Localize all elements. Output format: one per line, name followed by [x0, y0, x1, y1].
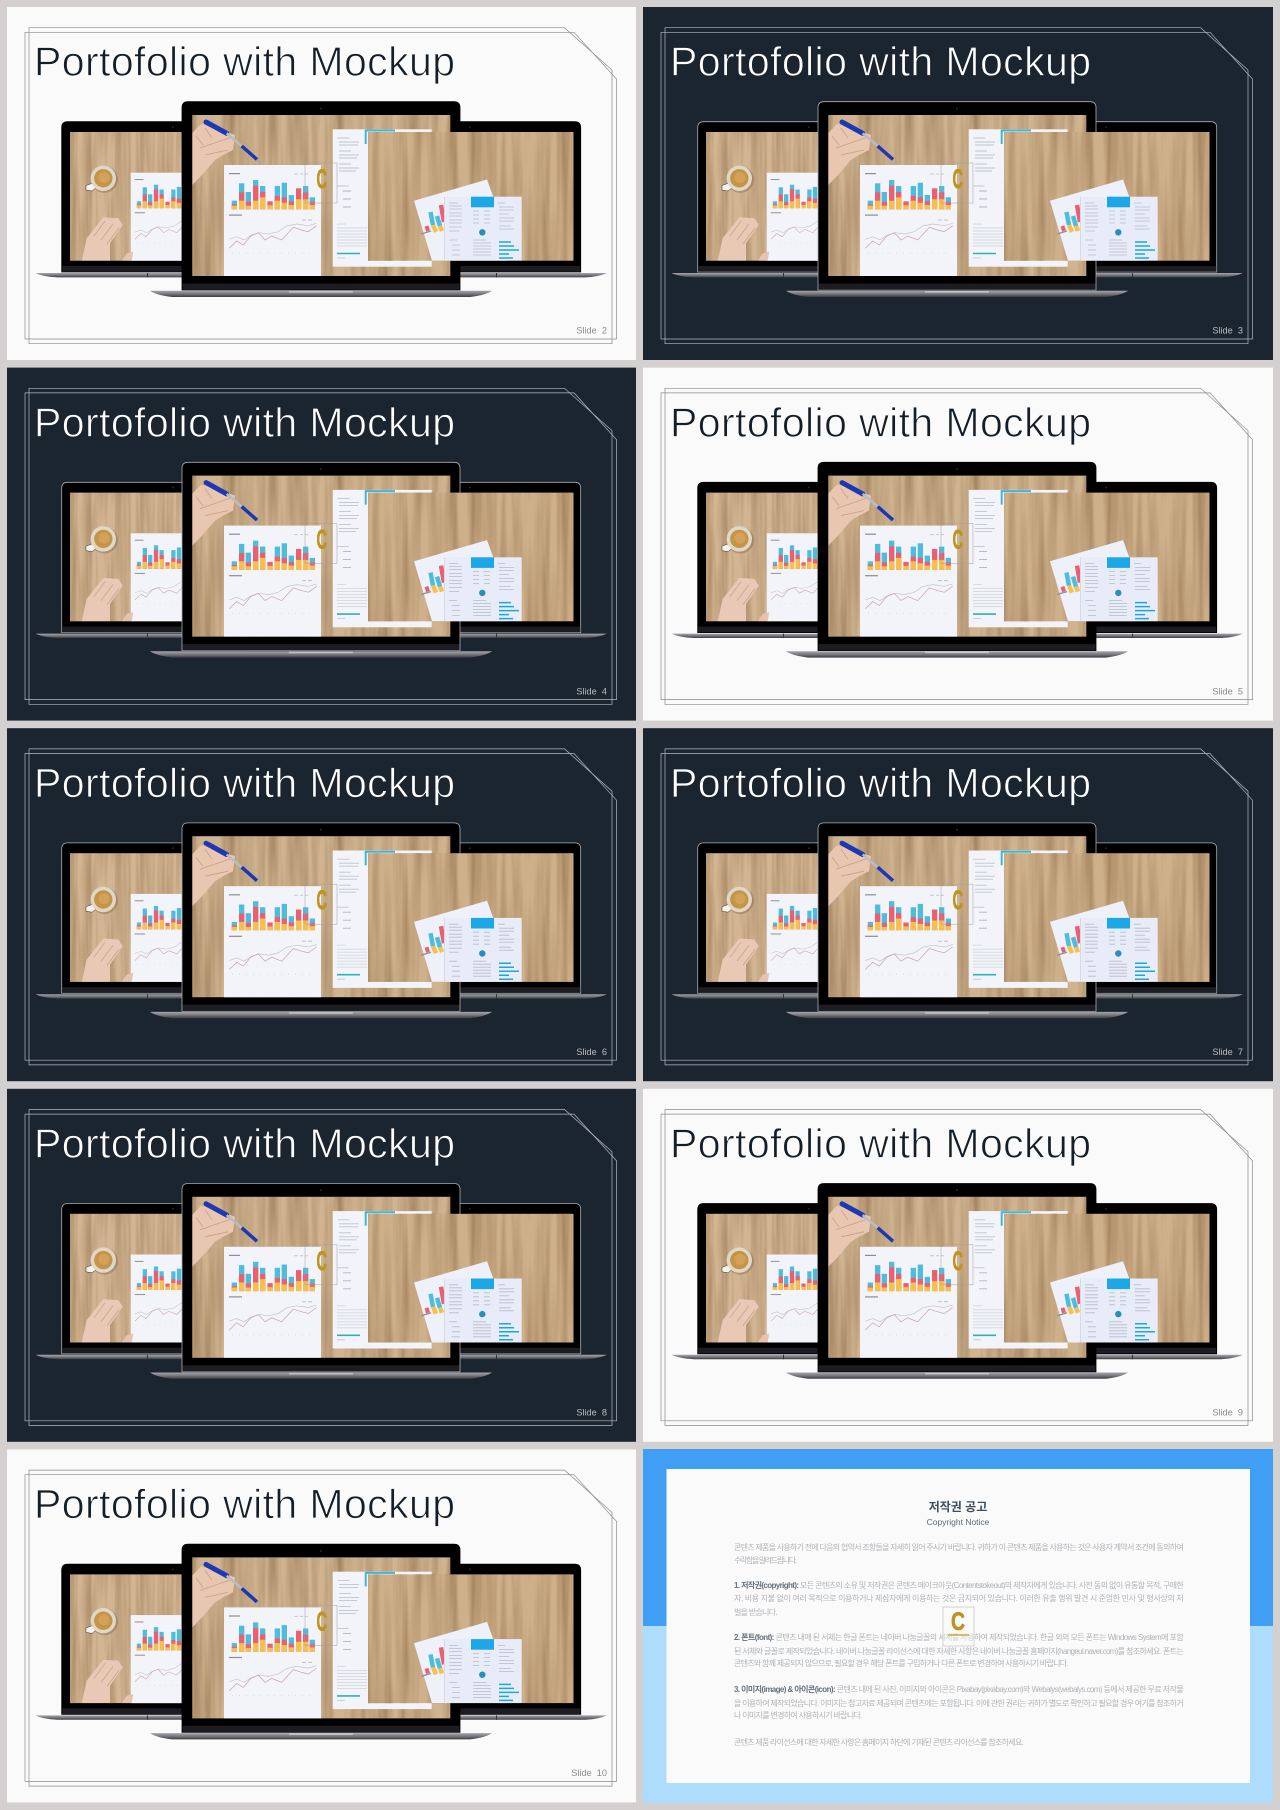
center laptop mockup	[150, 102, 492, 297]
notice body text: 콘텐츠 제품 라이선스에 대한 자세한 사항은 홈페이지 하단에 기재된 콘텐츠 라이선스를 참조하세요.	[734, 1737, 1024, 1747]
heading: Portofolio with Mockup	[34, 1121, 455, 1167]
left laptop mockup	[672, 843, 844, 999]
center laptop mockup	[786, 102, 1128, 297]
notice body text	[734, 1542, 1184, 1747]
light blue lower background	[643, 1626, 1273, 1803]
heading: Portofolio with Mockup	[34, 399, 455, 445]
double frame outline	[25, 1110, 616, 1426]
right laptop screen	[1004, 853, 1210, 982]
watermark logo: C	[316, 164, 327, 194]
right laptop screen	[368, 853, 574, 982]
slide background	[643, 7, 1273, 360]
watermark logo: C	[316, 525, 327, 555]
slide background	[643, 728, 1273, 1081]
double frame outline	[25, 388, 616, 704]
right laptop mockup	[1086, 843, 1243, 999]
heading: Portofolio with Mockup	[670, 1121, 1091, 1167]
panel: slide 8	[7, 1089, 636, 1442]
notice body text: 벌을 받습니다.	[734, 1607, 778, 1617]
heading: Portofolio with Mockup	[34, 1481, 455, 1527]
center laptop mockup	[150, 462, 492, 658]
right laptop mockup	[1086, 1204, 1243, 1359]
heading: Portofolio with Mockup	[34, 760, 455, 806]
right laptop mockup	[450, 122, 607, 277]
right laptop screen	[1004, 132, 1210, 261]
panel: slide 2	[7, 7, 636, 360]
right laptop screen	[1004, 493, 1210, 621]
slide background	[7, 368, 636, 721]
right laptop screen	[368, 132, 574, 261]
double frame outline	[661, 388, 1252, 704]
watermark logo: C	[952, 164, 963, 194]
notice body text: 콘텐츠 제품을 사용하기 전에 다음의 협약서 조항들을 자세히 읽어 주시기 바랍니다. 귀하가 이 콘텐츠 제품을 사용하는 것은 사용자 계약서 조건에 동의하여	[734, 1542, 1184, 1552]
double frame outline	[661, 749, 1252, 1065]
panel: slide 9	[643, 1089, 1273, 1442]
notice body text: 수락함을 알려드립니다.	[734, 1555, 797, 1565]
slide background	[7, 1449, 636, 1802]
watermark logo: C	[316, 1246, 327, 1276]
left laptop mockup	[36, 1204, 208, 1359]
right laptop mockup	[450, 843, 607, 999]
right laptop mockup	[450, 1204, 607, 1359]
slide number: Slide 9	[1212, 1408, 1243, 1418]
watermark logo	[941, 1245, 973, 1285]
notice body text: 을 이용하여 제작되었습니다. 이미지는 참고자료 제공되며 콘텐츠에는 포함됩니다. 이에 관한 권리는 귀하가 별도로 확인하고 필요할 경우 여기를 참조하거	[734, 1698, 1184, 1708]
panel: slide 10	[7, 1449, 636, 1802]
right laptop screen	[1004, 1214, 1210, 1342]
left laptop mockup	[672, 122, 844, 277]
panel: copyright notice	[643, 1449, 1273, 1803]
double frame outline	[25, 1470, 616, 1786]
slide number: Slide 8	[576, 1408, 607, 1418]
heading: Portofolio with Mockup	[670, 399, 1091, 445]
right laptop screen	[368, 1214, 574, 1342]
slide number: Slide 10	[571, 1768, 607, 1778]
slide background	[7, 728, 636, 1081]
watermark logo	[305, 524, 337, 564]
slide background	[643, 1089, 1273, 1442]
blue upper background	[643, 1449, 1273, 1626]
center laptop mockup	[786, 462, 1128, 658]
panel: slide 5	[643, 368, 1273, 721]
slide number: Slide 4	[576, 686, 607, 696]
notice subheading: Copyright Notice	[927, 1517, 990, 1527]
watermark logo: C	[951, 1608, 965, 1636]
watermark logo	[941, 524, 973, 564]
heading: Portofolio with Mockup	[670, 39, 1091, 85]
notice body text: 2. 폰트(font): 콘텐츠 내에 된 서체는 한글 폰트는 네이버 나눔글꼴의 서체를 사용하여 제작되었습니다. 한글 외의 모든 폰트는 Windows System에 포함	[734, 1632, 1184, 1642]
watermark logo: C	[952, 525, 963, 555]
right laptop mockup	[1086, 122, 1243, 277]
left laptop mockup	[36, 122, 208, 277]
right laptop mockup	[1086, 482, 1243, 638]
watermark logo: C	[316, 885, 327, 915]
slide number: Slide 2	[576, 326, 607, 336]
watermark logo	[305, 1245, 337, 1285]
double frame outline	[25, 28, 616, 344]
notice heading: 저작권 공고	[929, 1499, 987, 1514]
left laptop mockup	[36, 482, 208, 638]
panel: slide 4	[7, 368, 636, 721]
watermark logo	[941, 884, 973, 924]
notice body text: 1. 저작권(copyright): 모든 콘텐츠의 소유 및 저작권은 콘텐츠 메이크아웃(Contentstokeout)의 제작자에게 있습니다. 사전 동의 없이 유통할 목적, 구매한	[734, 1580, 1184, 1590]
panel: slide 6	[7, 728, 636, 1081]
right laptop screen	[368, 1574, 574, 1703]
watermark logo: C	[952, 885, 963, 915]
left laptop mockup	[36, 1564, 208, 1720]
left laptop mockup	[36, 843, 208, 999]
slide number: Slide 3	[1212, 326, 1243, 336]
watermark logo	[305, 884, 337, 924]
notice body text: 자, 비용 지불 없이 여러 목적으로 이용하거나 제삼자에게 이용하는 것은 금지되어 있습니다. 이러한 유출 행위 발견 시 준엄한 민사 및 형사상의 처	[734, 1593, 1184, 1603]
notice body text: 3. 이미지(image) & 아이콘(icon): 콘텐츠 내에 된 사진, 이미지와 아이콘은 Pixabay(pixabay.com)와 Webalys(webalys.com) 등에서 제공한 무료 저작물	[734, 1684, 1184, 1694]
right laptop mockup	[450, 482, 607, 638]
notice body text: 콘텐츠와 함께 제공되지 않으므로, 필요할 경우 해당 폰트를 구입하거나 다른 폰트로 변경하여 사용하시기 바랍니다.	[734, 1658, 1069, 1668]
notice body text: 나 이미지를 변경하여 사용하시기 바랍니다.	[734, 1710, 862, 1720]
center laptop mockup	[150, 1184, 492, 1379]
left laptop mockup	[672, 1204, 844, 1359]
double frame outline	[661, 1110, 1252, 1426]
left laptop mockup	[672, 482, 844, 638]
slide background	[643, 368, 1273, 721]
double frame outline	[25, 749, 616, 1065]
slide background	[7, 7, 636, 360]
white notice card	[666, 1469, 1250, 1783]
watermark logo: C	[952, 1246, 963, 1276]
heading: Portofolio with Mockup	[670, 760, 1091, 806]
right laptop mockup	[450, 1564, 607, 1720]
center laptop mockup	[150, 823, 492, 1018]
panel: slide 7	[643, 728, 1273, 1081]
slide number: Slide 5	[1212, 686, 1243, 696]
watermark logo	[941, 163, 973, 203]
watermark logo	[305, 163, 337, 203]
panel: slide 3	[643, 7, 1273, 360]
center laptop mockup	[150, 1544, 492, 1739]
slide number: Slide 6	[576, 1047, 607, 1057]
slide number: Slide 7	[1212, 1047, 1243, 1057]
watermark logo: C	[316, 1606, 327, 1636]
center laptop mockup	[786, 823, 1128, 1018]
watermark logo	[305, 1605, 337, 1645]
watermark logo	[943, 1607, 974, 1646]
center laptop mockup	[786, 1184, 1128, 1379]
heading: Portofolio with Mockup	[34, 39, 455, 85]
notice body text: 된 서체와 글꼴로 제작되었습니다. 네이버 나눔글꼴 라이선스에 대한 자세한 사항은 네이버 나눔글꼴 홈페이지(hangeul.naver.com)를 참조하세요. 폰트는	[734, 1646, 1184, 1656]
slide background	[7, 1089, 636, 1442]
double frame outline	[661, 28, 1252, 344]
right laptop screen	[368, 493, 574, 621]
